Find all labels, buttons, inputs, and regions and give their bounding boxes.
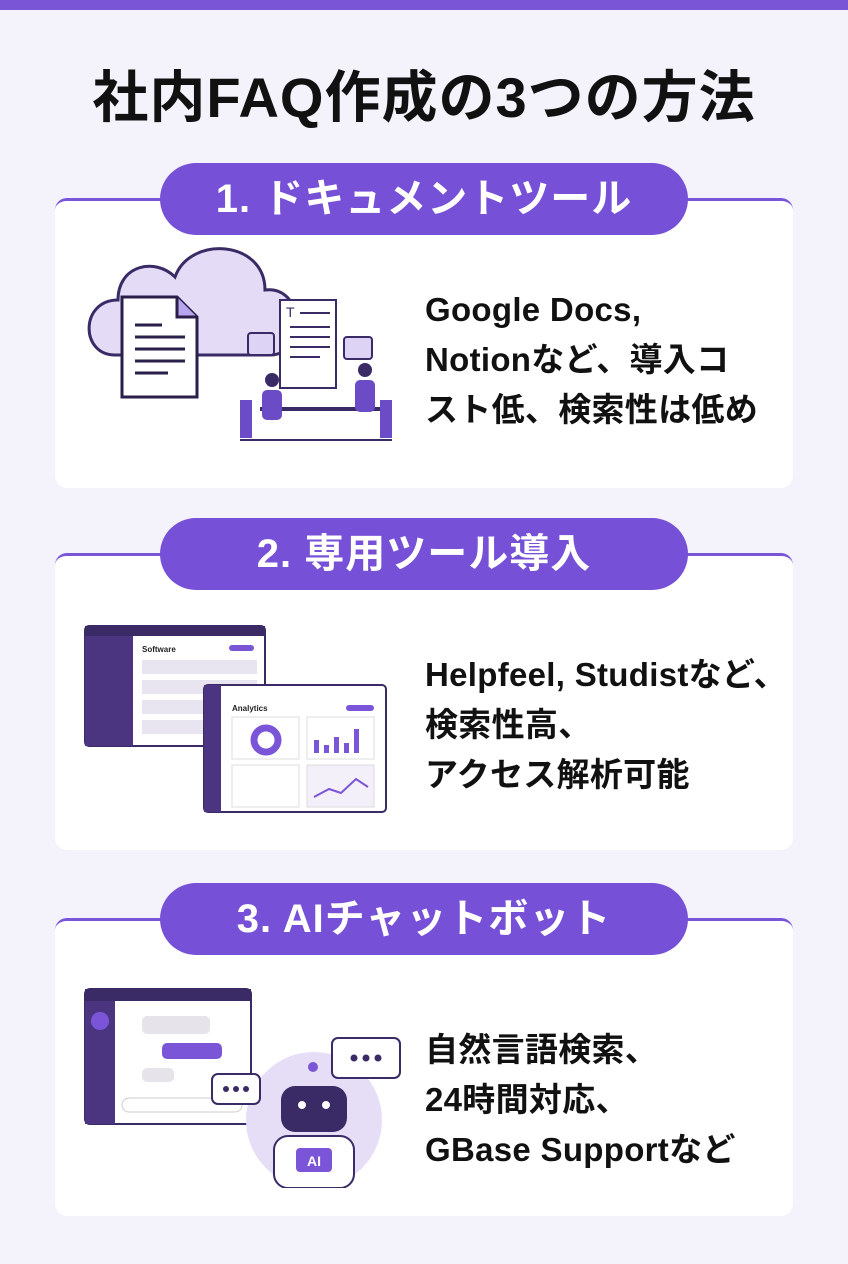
text: document tools: スト低、検索性は低め [425, 391, 758, 428]
text: AI chatbot: 24時間対応、 [425, 1081, 629, 1118]
illustration: cloud doc and people [88, 247, 392, 441]
text: AI chatbot [425, 1031, 736, 1168]
heading: 1: 1. ドキュメントツール [216, 177, 632, 221]
heading: 1 [160, 163, 688, 235]
illustration: cloud doc and people: T [286, 304, 295, 320]
panel: AI chatbot [55, 918, 793, 1216]
text: dedicated tools: Helpfeel, Studistなど、 [425, 656, 787, 693]
text: AI chatbot: 自然言語検索、 [425, 1031, 658, 1068]
illustration: software dashboards [84, 625, 387, 813]
text: document tools: Google Docs, [425, 291, 641, 328]
heading: 2 [160, 518, 688, 590]
heading: 3 [160, 883, 688, 955]
text: dedicated tools [425, 656, 787, 793]
heading: 3: 3. AIチャットボット [237, 897, 611, 941]
illustration: chat window and robot: AI [307, 1153, 321, 1169]
text: dedicated tools: アクセス解析可能 [425, 756, 690, 793]
illustration: chat window and robot [84, 988, 401, 1188]
title: 社内FAQ作成の3つの方法 [92, 66, 756, 129]
panel: dedicated tools [55, 553, 793, 850]
text: AI chatbot: GBase Supportなど [425, 1131, 736, 1168]
illustration: software dashboards: Software [142, 645, 176, 654]
heading: 2: 2. 専用ツール導入 [257, 532, 591, 576]
text: dedicated tools: 検索性高、 [425, 706, 592, 743]
text: document tools [425, 291, 758, 428]
illustration: software dashboards: Analytics [232, 704, 268, 713]
panel: document tools [55, 198, 793, 488]
text: document tools: Notionなど、導入コ [425, 341, 729, 378]
